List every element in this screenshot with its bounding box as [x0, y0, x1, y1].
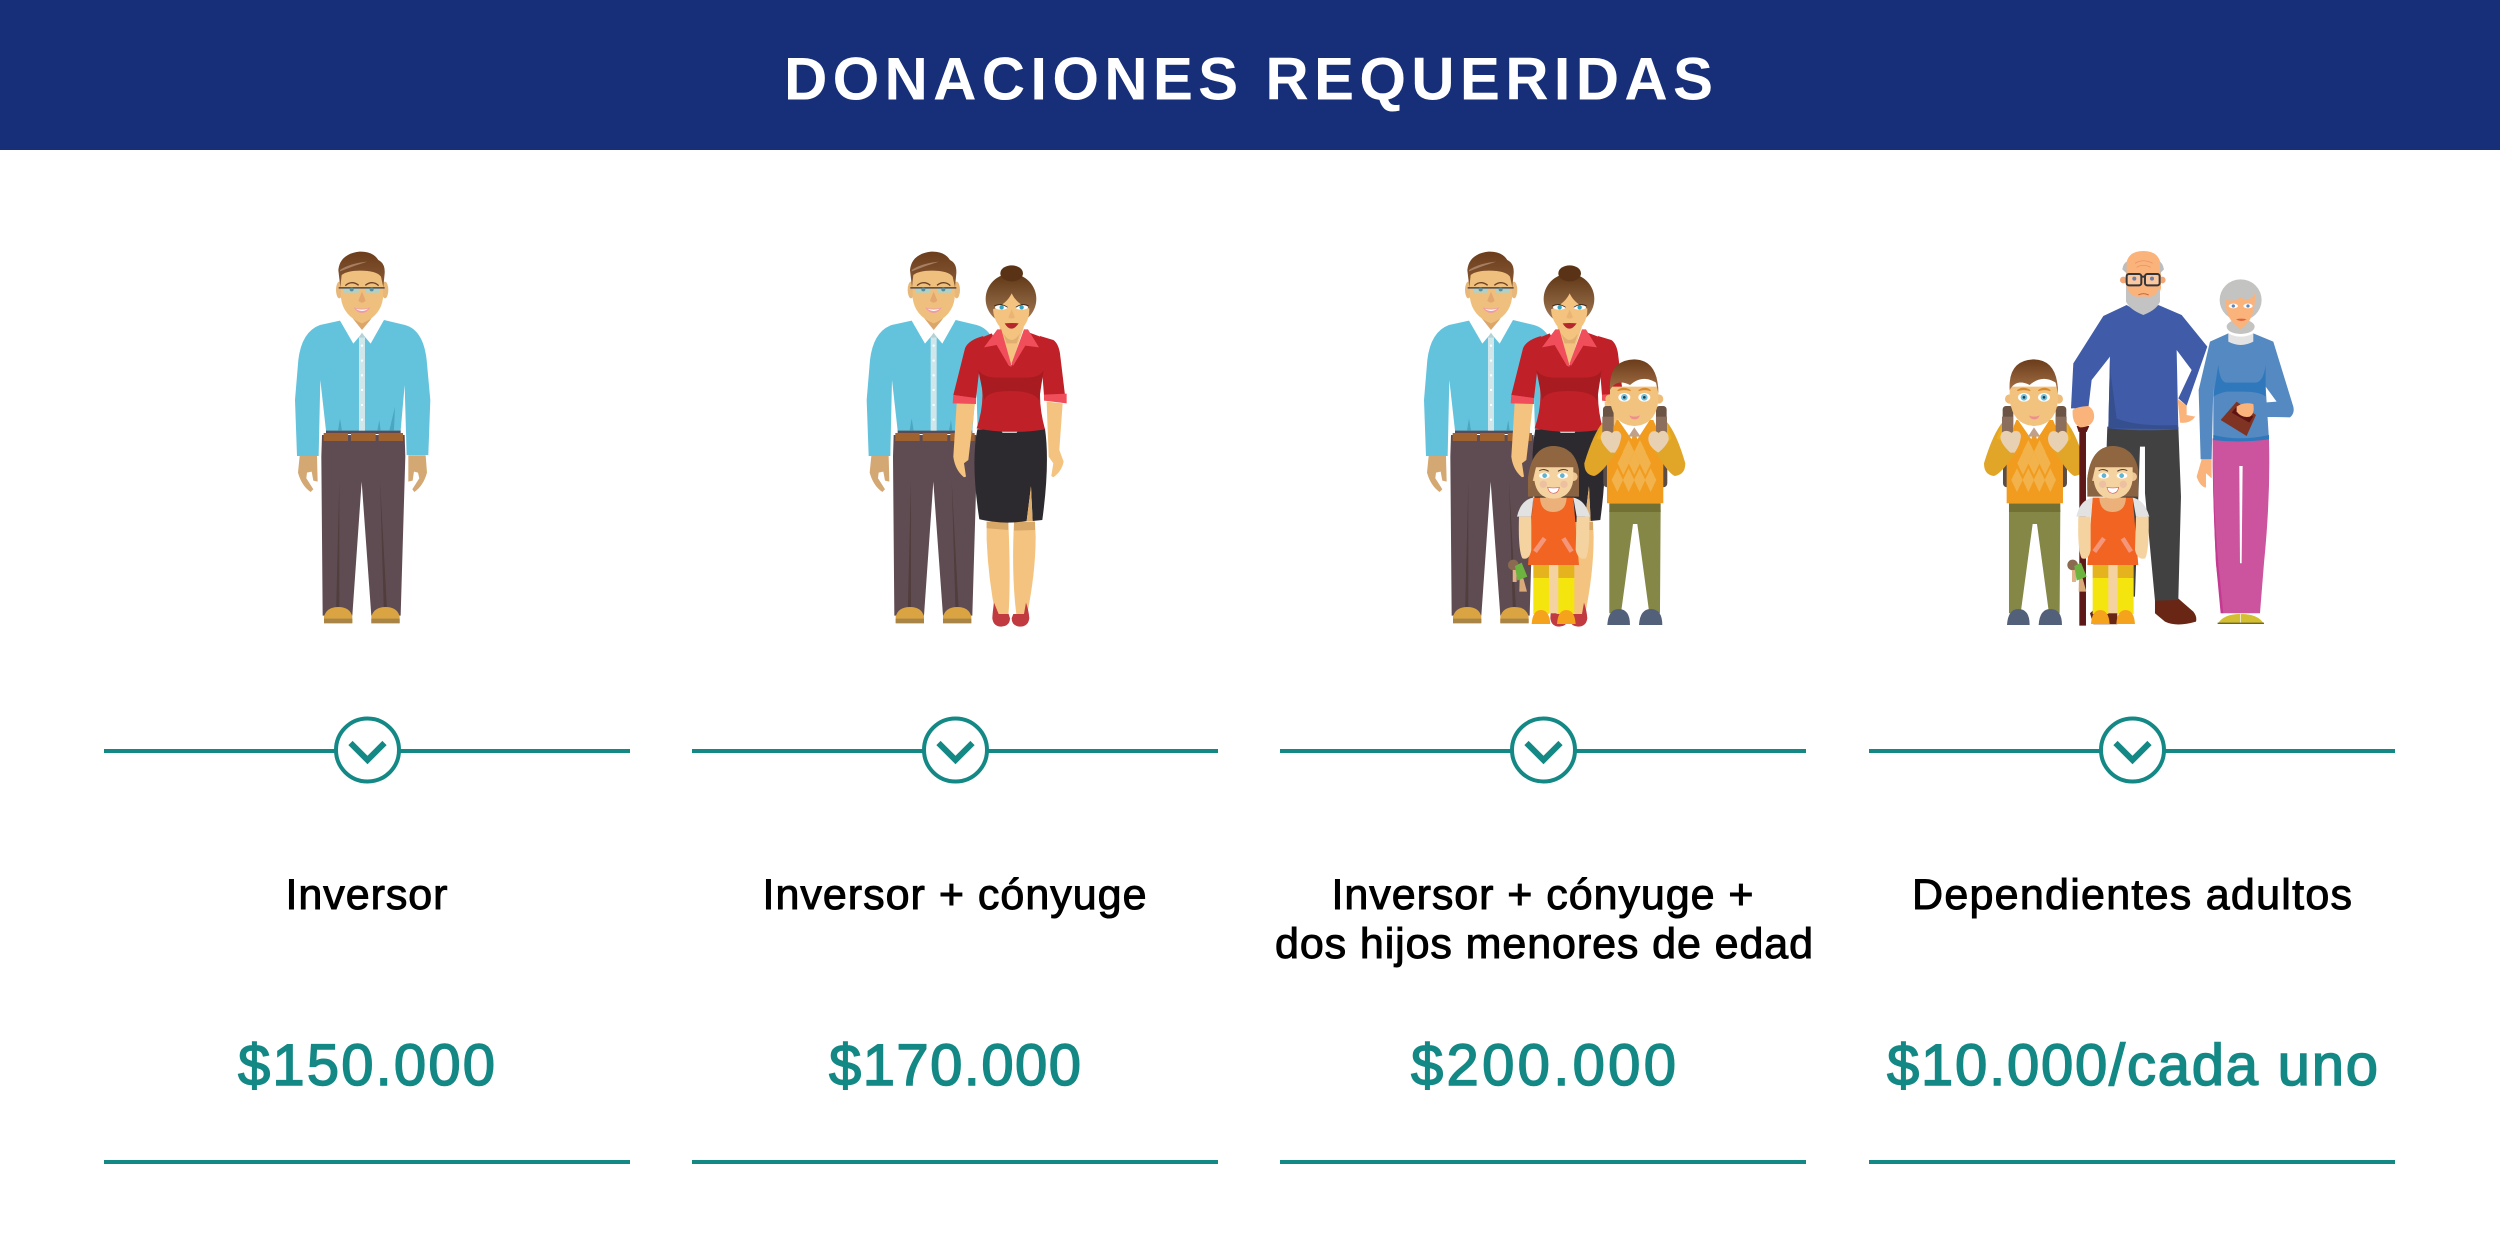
illustration: family	[1424, 252, 1685, 627]
header banner	[0, 0, 2500, 150]
label: inversor: Inversor	[286, 871, 448, 919]
bottom rule	[1869, 1160, 2395, 1164]
illustration: couple	[867, 252, 1067, 627]
divider with chevron icon	[104, 718, 630, 782]
panel: dependientes adultos	[1869, 251, 2395, 1164]
label: inversor + conyuge + dos hijos menores de edad: Inversor + cónyuge +	[1332, 871, 1754, 919]
price: 170.000: $170.000	[829, 1033, 1081, 1098]
title: DONACIONES REQUERIDAS	[784, 46, 1713, 112]
price: 200.000: $200.000	[1411, 1033, 1676, 1098]
panel: inversor + conyuge + dos hijos	[1275, 252, 1813, 1164]
bottom rule	[104, 1160, 630, 1164]
label: dependientes adultos: Dependientes adultos	[1912, 871, 2352, 919]
price: 150.000: $150.000	[238, 1033, 495, 1098]
label: inversor + conyuge: Inversor + cónyuge	[762, 871, 1146, 919]
divider with chevron icon	[1280, 718, 1806, 782]
price: 10.000 cada uno: $10.000/cada uno	[1887, 1033, 2378, 1098]
divider with chevron icon	[1869, 718, 2395, 782]
bottom rule	[1280, 1160, 1806, 1164]
label: inversor + conyuge + dos hijos menores de edad: dos hijos menores de edad	[1275, 920, 1813, 968]
bottom rule	[692, 1160, 1218, 1164]
illustration: dependents	[1984, 251, 2294, 626]
panel: inversor + conyuge	[692, 252, 1218, 1164]
panel: inversor	[104, 252, 630, 1164]
illustration: investor	[295, 252, 430, 623]
divider with chevron icon	[692, 718, 1218, 782]
label: inversor + conyuge + dos hijos menores de edad	[1275, 871, 1813, 968]
